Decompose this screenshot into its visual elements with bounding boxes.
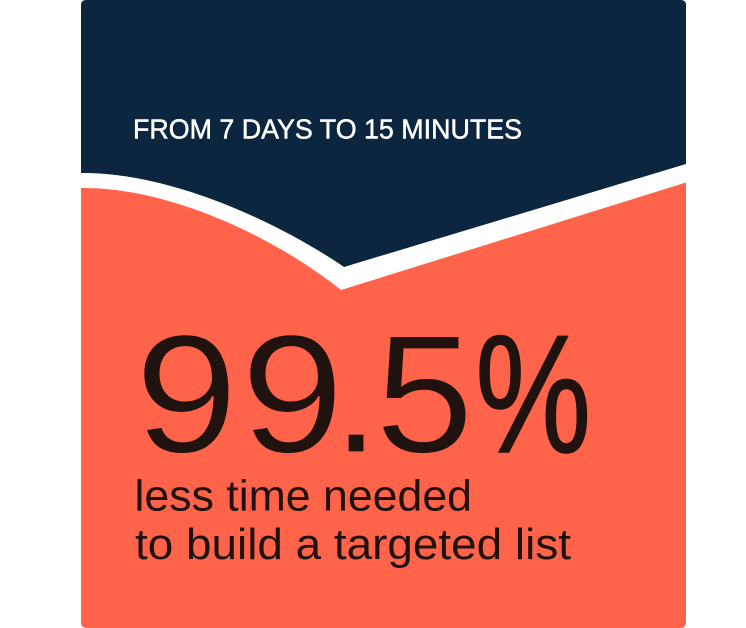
big number: 99.5%: %: [475, 300, 591, 488]
heading: from 7 days to 15 minutes: FROM 7 DAYS TO 15 MINUTES: [133, 114, 522, 144]
panel: coral stat: [81, 182, 686, 628]
stat description: [134, 472, 571, 569]
big number: 99.5%: .: [333, 300, 379, 488]
big number: 99.5%: 9: [135, 301, 238, 488]
stat description: less time needed: [134, 472, 472, 520]
big number: 99.5%: [135, 300, 591, 488]
big number: 99.5%: 5: [375, 300, 474, 488]
stat description: to build a targeted list: [135, 520, 571, 569]
big number: 99.5%: 9: [241, 301, 344, 488]
